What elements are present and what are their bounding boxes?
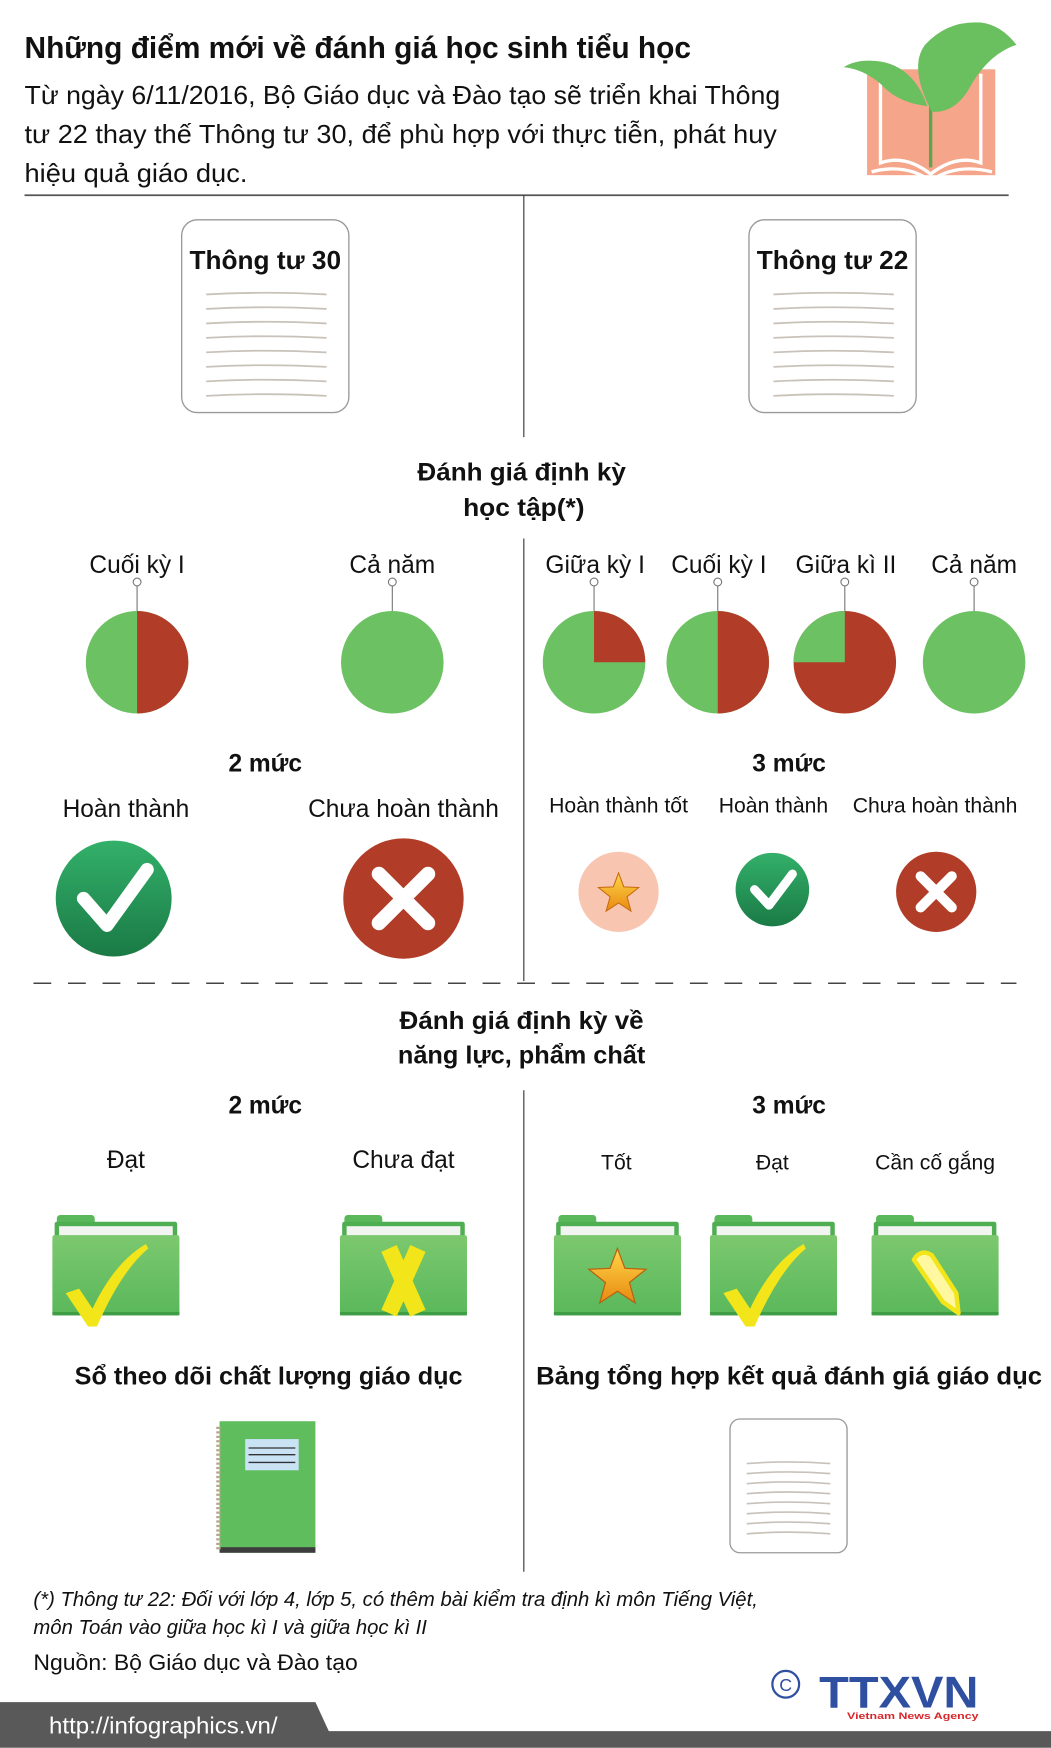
intro text: [25, 82, 780, 188]
icon: book with sprout: [844, 22, 1016, 181]
logo: TTXVN: C: [779, 1675, 792, 1695]
pie labels: Cả năm: [931, 552, 1017, 579]
folder: X: [340, 1215, 467, 1315]
icon: summary document: [730, 1419, 847, 1553]
footnote: môn Toán vào giữa học kì I và giữa học kì II: [33, 1617, 427, 1639]
text: 3 mức: [752, 1093, 826, 1120]
text: Hoàn thành: [719, 795, 828, 818]
doc: Thông tư 22: Thông tư 22: [757, 247, 908, 275]
doc: Thông tư 30: Thông tư 30: [189, 247, 341, 275]
pies: [86, 578, 1025, 714]
heading: năng lực, phẩm chất: [398, 1008, 645, 1069]
doc: Thông tư 30: [182, 220, 349, 413]
text: Tốt: [601, 1151, 632, 1174]
heading: học tập: Đánh giá định kỳ: [417, 460, 626, 487]
text: Chưa hoàn thành: [853, 795, 1017, 818]
text: Cần cố gắng: [875, 1149, 995, 1174]
pie labels: [89, 552, 1017, 579]
text: Hoàn thành tốt: [549, 795, 688, 818]
text: Hoàn thành: [63, 796, 189, 823]
text: Chưa đạt: [352, 1147, 455, 1174]
icon: big check: [56, 841, 172, 956]
pie labels: Cả năm: [349, 552, 435, 579]
footnote: [33, 1589, 758, 1639]
text: Đạt: [107, 1147, 145, 1174]
folder: star: [554, 1215, 681, 1315]
heading: năng lực, phẩm chất: năng lực, phẩm chất: [398, 1042, 645, 1069]
footer bar: http://infographics.vn/: [49, 1712, 278, 1738]
heading: Sổ theo dõi: Sổ theo dõi chất lượng giáo dục: [75, 1363, 463, 1390]
footer bar: [0, 1702, 1051, 1748]
heading: học tập: học tập(*): [463, 495, 585, 522]
logo: TTXVN: [772, 1669, 979, 1721]
icon: small check: [736, 853, 809, 926]
footnote: (*) Thông tư 22: Đối với lớp 4, lớp 5, có thêm bài kiểm tra định kì môn Tiếng Việt,: [33, 1589, 758, 1611]
intro text: tư 22 thay thế Thông tư 30, để phù hợp với thực tiễn, phát huy: [25, 120, 777, 149]
icon: big X: [343, 838, 464, 959]
pie labels: Cuối kỳ I: [89, 552, 185, 579]
text: Chưa hoàn thành: [308, 796, 499, 823]
text: Đạt: [756, 1151, 789, 1174]
logo: TTXVN: Vietnam News Agency: [847, 1711, 979, 1721]
intro text: hiệu quả giáo dục.: [25, 160, 247, 188]
text: 3 mức: [752, 750, 826, 777]
intro text: Từ ngày 6/11/2016, Bộ Giáo dục và Đào tạo sẽ triển khai Thông: [25, 82, 780, 110]
source: Nguồn: Bộ Giáo dục và Đào tạo: [33, 1650, 358, 1675]
logo: TTXVN: TTXVN: [819, 1669, 979, 1718]
levels: 2 mức / 3 mức: 2 mức: [228, 750, 302, 777]
pie labels: Giữa kì II: [796, 552, 896, 579]
pie labels: Giữa kỳ I: [545, 552, 645, 579]
icon: star circle: [578, 852, 659, 932]
folder: check: [52, 1215, 179, 1326]
heading: học tập: [417, 460, 626, 522]
folder: pencil: [872, 1215, 999, 1315]
pie labels: Cuối kỳ I: [671, 552, 767, 579]
heading: năng lực, phẩm chất: Đánh giá định kỳ về: [400, 1008, 644, 1035]
folder: check: [710, 1215, 837, 1326]
icon: small X: [896, 852, 976, 932]
doc: Thông tư 22: [749, 220, 916, 413]
icon: notebook: [218, 1421, 315, 1553]
heading: Bảng tổng hợp: Bảng tổng hợp kết quả đánh giá giáo dục: [536, 1363, 1042, 1390]
text: 2 mức: [228, 1093, 302, 1120]
title: Những điểm mới về đánh giá học sinh tiểu học: [25, 32, 691, 65]
